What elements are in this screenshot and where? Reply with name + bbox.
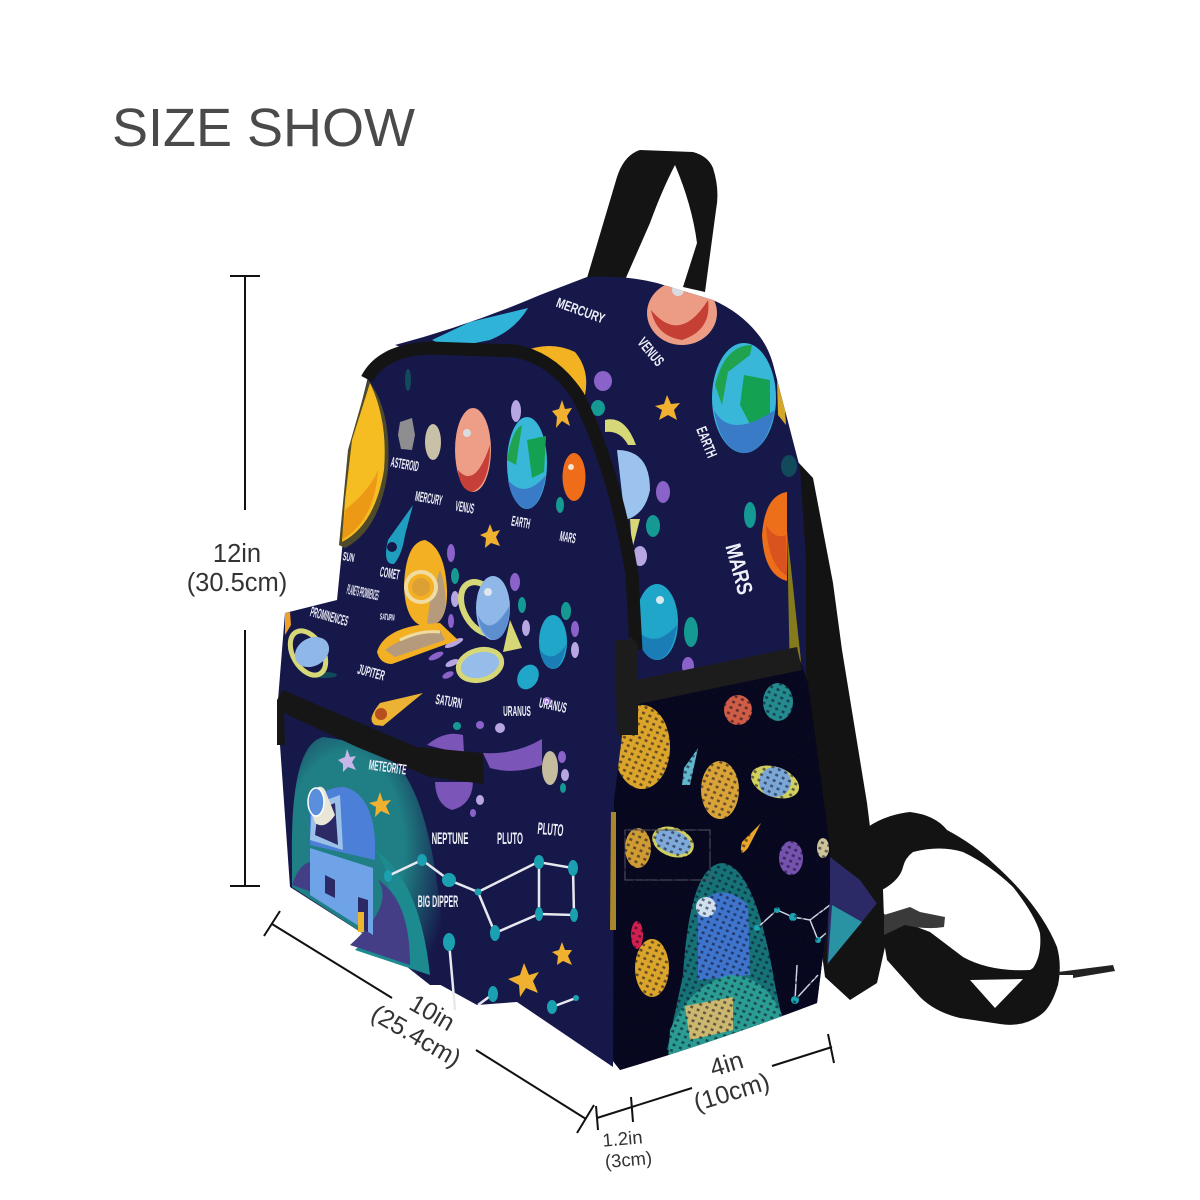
- main zipper: [367, 348, 636, 650]
- white labels: [308, 294, 757, 911]
- white labels: EARTH: [510, 514, 531, 533]
- white labels: URANUS: [503, 704, 531, 720]
- depth label: (10cm): [690, 1068, 773, 1117]
- observatory: [292, 737, 445, 985]
- planet: jupiter edge: [777, 380, 786, 425]
- white labels: METEORITE: [368, 758, 407, 778]
- planet: saturn: [452, 575, 522, 685]
- planet: neptune: [427, 734, 473, 810]
- white labels: SATURN: [434, 692, 463, 712]
- white labels: PLUTO: [537, 819, 564, 840]
- side pocket: [612, 660, 830, 1070]
- stars lower: [338, 749, 572, 997]
- planet: venus: [647, 281, 717, 345]
- zipper pull: [615, 636, 638, 735]
- white labels: SUN: [342, 549, 356, 565]
- orange planet behind zipper: [530, 346, 586, 395]
- strap side panel teal: [828, 905, 862, 963]
- white labels: EARTH: [693, 424, 720, 460]
- side pocket artwork: [612, 660, 832, 1070]
- white labels: ASTEROID: [389, 455, 420, 475]
- planet: mars: [762, 492, 787, 581]
- flap edge orange: [285, 612, 291, 635]
- white labels: COMET: [379, 565, 401, 584]
- depth label: [690, 1046, 773, 1117]
- front pocket zipper: [277, 690, 484, 784]
- gusset artwork: [432, 281, 803, 680]
- backpack body side gusset: [395, 277, 830, 1070]
- planet: uranus: [636, 584, 678, 660]
- flap saturn: [283, 625, 335, 681]
- white labels: MERCURY: [554, 294, 607, 327]
- planet: uranus: [513, 615, 567, 693]
- width label: (25.4cm): [366, 999, 466, 1073]
- planet: ringed saturn: [605, 419, 650, 550]
- white labels: SATURN: [379, 613, 395, 623]
- rocket on top: [432, 308, 528, 343]
- comet: [386, 505, 413, 564]
- strap side panel: [827, 857, 882, 965]
- white labels: PLUTO: [497, 829, 523, 848]
- dimension: depth: [597, 1034, 834, 1118]
- height label: [187, 540, 287, 597]
- width label: 10in: [405, 989, 459, 1037]
- offset label: [602, 1126, 653, 1172]
- buckle: [884, 907, 945, 935]
- white labels: VENUS: [454, 499, 475, 518]
- title: SIZE SHOW: [112, 98, 415, 158]
- dimension: height: [230, 276, 260, 886]
- coloured dots: [591, 371, 797, 675]
- yellow strip on side seam: [610, 812, 616, 930]
- planets row: [398, 408, 586, 509]
- pocket edge purple planet: [483, 739, 542, 771]
- height label: (30.5cm): [187, 569, 287, 597]
- backpack front panel: [278, 347, 634, 1067]
- white labels: JUPITER: [356, 662, 386, 684]
- olive strip: [787, 530, 802, 664]
- white labels: URANUS: [538, 696, 568, 717]
- white labels: VENUS: [634, 334, 667, 370]
- offset label: (3cm): [604, 1147, 653, 1172]
- white labels: PLANETS PROMINENCES: [345, 583, 380, 604]
- star: [655, 395, 680, 420]
- constellation: big dipper: [384, 854, 579, 1014]
- planet: pluto: [542, 751, 558, 785]
- star: [480, 524, 500, 548]
- dimension: strap offset ticks: [596, 1097, 633, 1130]
- strap loop: [860, 812, 1060, 1025]
- dots on front panel: [313, 369, 579, 817]
- white labels: MARS: [558, 529, 577, 547]
- top handle: [587, 150, 717, 292]
- shoulder strap: [798, 462, 885, 1000]
- height label: 12in: [213, 540, 261, 568]
- offset label: 1.2in: [602, 1126, 643, 1151]
- white labels: BIG DIPPER: [418, 891, 459, 911]
- planet: earth: [712, 343, 776, 453]
- dimension: width: [264, 911, 594, 1133]
- depth label: 4in: [707, 1046, 747, 1083]
- white labels: MARS: [720, 541, 757, 597]
- side pocket trim: [636, 647, 802, 704]
- meteorite: [371, 693, 423, 726]
- white labels: MERCURY: [414, 489, 444, 509]
- planet: jupiter: [377, 540, 458, 664]
- star near zipper: [552, 400, 572, 428]
- white labels: PROMINENCES: [308, 604, 350, 630]
- planet: sun: [339, 380, 389, 548]
- white labels: NEPTUNE: [432, 829, 469, 848]
- strap tail: [1058, 965, 1115, 978]
